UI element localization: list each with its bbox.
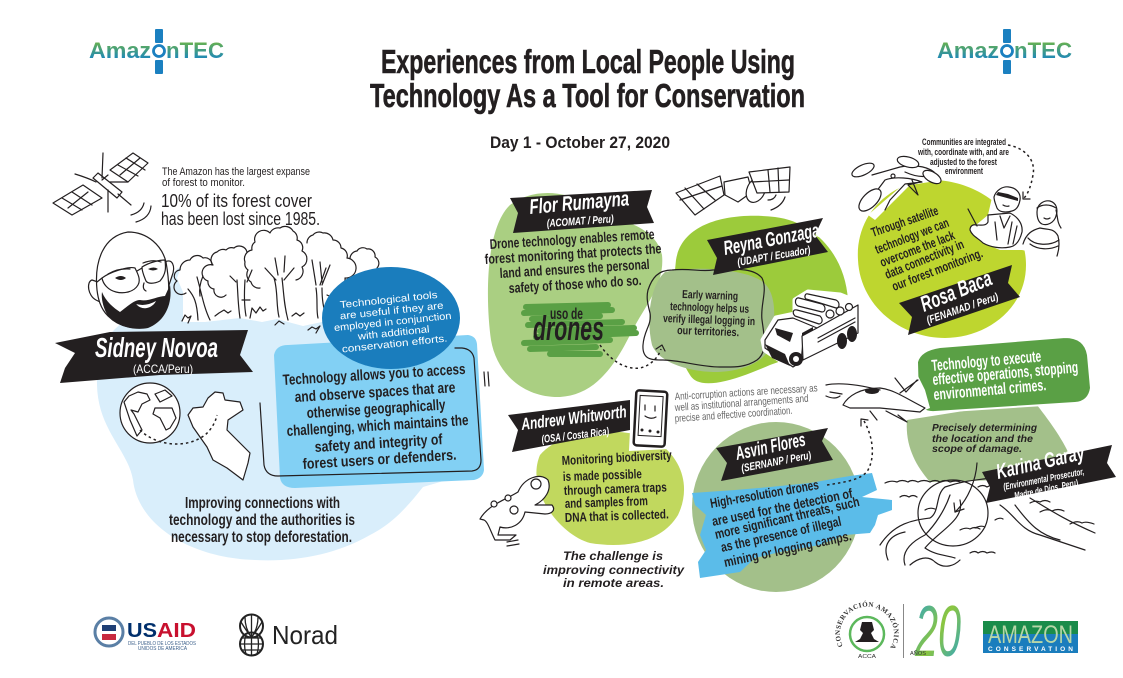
body text: through camera traps (564, 479, 667, 498)
logo: Amazon Conservation: CONSERVATION (988, 646, 1073, 653)
body text: technology helps us (670, 301, 749, 316)
callout: technological tools: are useful if they are (339, 301, 445, 322)
caption: anti-corruption: Anti-corruption actions are necessary as (674, 382, 818, 403)
body text (663, 289, 755, 339)
body text: DNA that is collected. (565, 506, 669, 525)
callout: challenge (543, 549, 685, 590)
caption: communities: Communities are integrated (922, 137, 1006, 147)
intro text: 10% of its forest cover (161, 191, 312, 211)
body text (561, 447, 673, 525)
logo: Conservacion Amazonica ACCA: CONSERVACIÓN AMAZÓNICA (835, 600, 899, 648)
logo: USAID: UNIDOS DE AMERICA (138, 646, 188, 652)
title: Technology As a Tool for Conservation (370, 77, 805, 114)
logo: Norad (240, 614, 338, 656)
arrow: communities to people (1008, 145, 1033, 199)
logo: Conservacion Amazonica ACCA: ACCA (858, 654, 876, 660)
intro text: of forest to monitor. (162, 177, 245, 189)
caption: communities (917, 137, 1009, 176)
name banner: (SERNANP / Peru) (740, 450, 813, 475)
name banner (55, 330, 253, 383)
name banner (707, 218, 828, 275)
body text: Monitoring biodiversity (561, 447, 673, 468)
body text: is made possible (563, 466, 642, 484)
caption: location and damage: scope of damage. (932, 443, 1022, 455)
brush label: uso de drones (524, 305, 636, 354)
icon: map of Peru (188, 392, 250, 480)
icon: separator marks (484, 372, 489, 386)
closing text: technology and the authorities is (169, 512, 355, 529)
logo: AmazonTEC left: Amaz (89, 38, 151, 63)
panel: Rosa Baca (850, 137, 1061, 338)
closing text: necessary to stop deforestation. (171, 529, 352, 546)
quote box: forest users or defenders. (302, 447, 457, 473)
callout: challenge: in remote areas. (563, 576, 664, 590)
closing text (169, 495, 355, 546)
body text: our forest monitoring. (890, 245, 985, 294)
panel: Asvin Flores (692, 422, 892, 592)
icon: frog (480, 476, 554, 546)
name banner (899, 265, 1020, 335)
body text: technology we can (873, 215, 951, 257)
callout: execute operations: environmental crimes. (933, 377, 1047, 404)
name banner (716, 428, 833, 481)
panel: Andrew Whitworth (480, 389, 685, 590)
logo: Conservacion Amazonica ACCA: AÑOS (910, 650, 926, 657)
name banner: (ACOMAT / Peru) (546, 213, 614, 230)
brush label: uso de drones: drones (533, 310, 604, 348)
body text (709, 477, 861, 570)
logo: AmazonTEC right: Amaz (937, 38, 999, 63)
logo: Amazon Conservation: AMAZON (988, 621, 1073, 649)
callout: execute operations: Technology to execute (931, 348, 1042, 375)
arrow: globe to Peru (140, 415, 217, 444)
callout: challenge: improving connectivity (543, 563, 685, 577)
icon: drone (850, 154, 943, 220)
name banner: (ACCA/Peru) (133, 362, 193, 376)
body text: data connectivity in (883, 236, 966, 282)
title: Experiences from Local People Using (381, 43, 795, 80)
name banner (510, 187, 654, 233)
caption: location and damage (932, 422, 1038, 455)
callout: technological tools: with additional (356, 324, 430, 343)
quote box (260, 335, 484, 488)
logo: AmazonTEC right (937, 29, 1072, 74)
body text: Through satellite (869, 203, 940, 240)
closing text: Improving connections with (185, 495, 340, 512)
arrow: drones to early warning (600, 345, 665, 368)
intro text: has been lost since 1985. (161, 209, 320, 229)
caption: location and damage: the location and the (932, 433, 1033, 445)
name banner: Asvin Flores (733, 430, 807, 465)
quote box: and observe spaces that are (294, 379, 456, 406)
body text: overcome the lack (878, 227, 957, 270)
logo: USAID: DEL PUEBLO DE LOS ESTADOS (128, 641, 197, 647)
body text: forest monitoring that protects the (484, 240, 662, 267)
logo: AmazonTEC right: nTEC (1014, 38, 1072, 63)
name banner: (OSA / Costa Rica) (541, 426, 610, 446)
quote box: Technology allows you to access (282, 361, 466, 389)
callout: challenge: The challenge is (563, 549, 663, 563)
caption: anti-corruption (674, 382, 818, 425)
body text: land and ensures the personal (499, 256, 650, 281)
name banner (982, 441, 1116, 503)
caption: communities: environment (945, 166, 983, 176)
icon: satellite dish (676, 167, 790, 215)
name banner: Madre de Dios, Peru) (1013, 478, 1079, 502)
title (370, 43, 805, 114)
name banner: Sidney Novoa (95, 332, 218, 363)
callout: technological tools: conservation efforts. (341, 334, 448, 356)
logo: USAID (95, 618, 197, 652)
icon: Sidney portrait (89, 232, 174, 329)
caption: location and damage: Precisely determining (932, 422, 1038, 434)
body text: more significant threats, such (713, 494, 861, 542)
logo: Conservacion Amazonica ACCA: 20 (914, 592, 961, 672)
quote box: otherwise geographically (306, 397, 446, 422)
body text: are used for the detection of (711, 486, 854, 529)
arrow: drones to plane (827, 419, 872, 485)
body text: and samples from (565, 493, 648, 511)
name banner: (Environmental Prosecutor, (1002, 467, 1085, 493)
name banner: Flor Rumayna (528, 187, 630, 219)
icon: speech outline (643, 269, 764, 367)
body text: Early warning (682, 289, 738, 303)
icon: globe (120, 383, 180, 443)
callout: technological tools: employed in conjunction (333, 311, 452, 334)
caption: communities: adjusted to the forest (930, 157, 997, 167)
body text: High-resolution drones (709, 477, 820, 511)
name banner (508, 400, 630, 452)
panel: Flor Rumayna (484, 187, 662, 397)
body text: our territories. (677, 325, 739, 339)
logo: AmazonTEC left (89, 29, 224, 74)
logo: USAID: AID (157, 620, 196, 642)
callout: technological tools (322, 267, 460, 369)
icon: people (968, 186, 1061, 258)
date subtitle: Day 1 - October 27, 2020 (490, 133, 670, 152)
callout: technological tools: Technological tools (339, 290, 438, 311)
panel: Sidney Novoa (55, 226, 484, 560)
icon: tablet (630, 389, 670, 450)
logo: Norad: Norad (272, 620, 338, 650)
icon: plane (825, 370, 930, 422)
logo: USAID: US (127, 620, 157, 642)
icon: trees (174, 226, 379, 333)
panel: Karina Garay (880, 337, 1116, 566)
intro text: The Amazon has the largest expanse (162, 166, 310, 178)
name banner: Rosa Baca (917, 265, 995, 317)
background blob (97, 268, 474, 560)
name banner: Reyna Gonzaga (722, 220, 821, 260)
quote box: safety and integrity of (314, 431, 444, 456)
name banner: (FENAMAD / Peru) (925, 291, 1000, 327)
icon: satellite (53, 153, 151, 222)
caption: communities: with, coordinate with, and are (917, 147, 1009, 157)
name banner: Andrew Whitworth (519, 402, 628, 434)
name banner: (UDAPT / Ecuador) (736, 244, 812, 269)
logo: AmazonTEC left: nTEC (166, 38, 224, 63)
quote box: challenging, which maintains the (286, 412, 469, 440)
body text: mining or logging camps. (723, 528, 853, 570)
callout: execute operations (917, 337, 1091, 412)
panel: Reyna Gonzaga (643, 167, 860, 383)
brush highlight (692, 473, 892, 578)
body text: Drone technology enables remote (489, 226, 655, 252)
arrow: location to river (954, 463, 977, 512)
icon: truck (763, 292, 860, 370)
caption: anti-corruption: well as institutional arrangements and (674, 393, 809, 414)
caption: anti-corruption: precise and effective coordination. (674, 405, 793, 425)
body text: verify illegal logging in (663, 313, 755, 328)
name banner: Karina Garay (994, 441, 1088, 484)
logo: Conservacion Amazonica ACCA (835, 592, 961, 672)
intro text (161, 166, 320, 229)
river landscape (880, 478, 1095, 566)
body text (484, 226, 662, 296)
body text: as the presence of illegal (719, 514, 843, 555)
body text (869, 203, 985, 294)
brush label: uso de drones: uso de (550, 306, 583, 323)
body text: safety of those who do so. (508, 272, 642, 296)
